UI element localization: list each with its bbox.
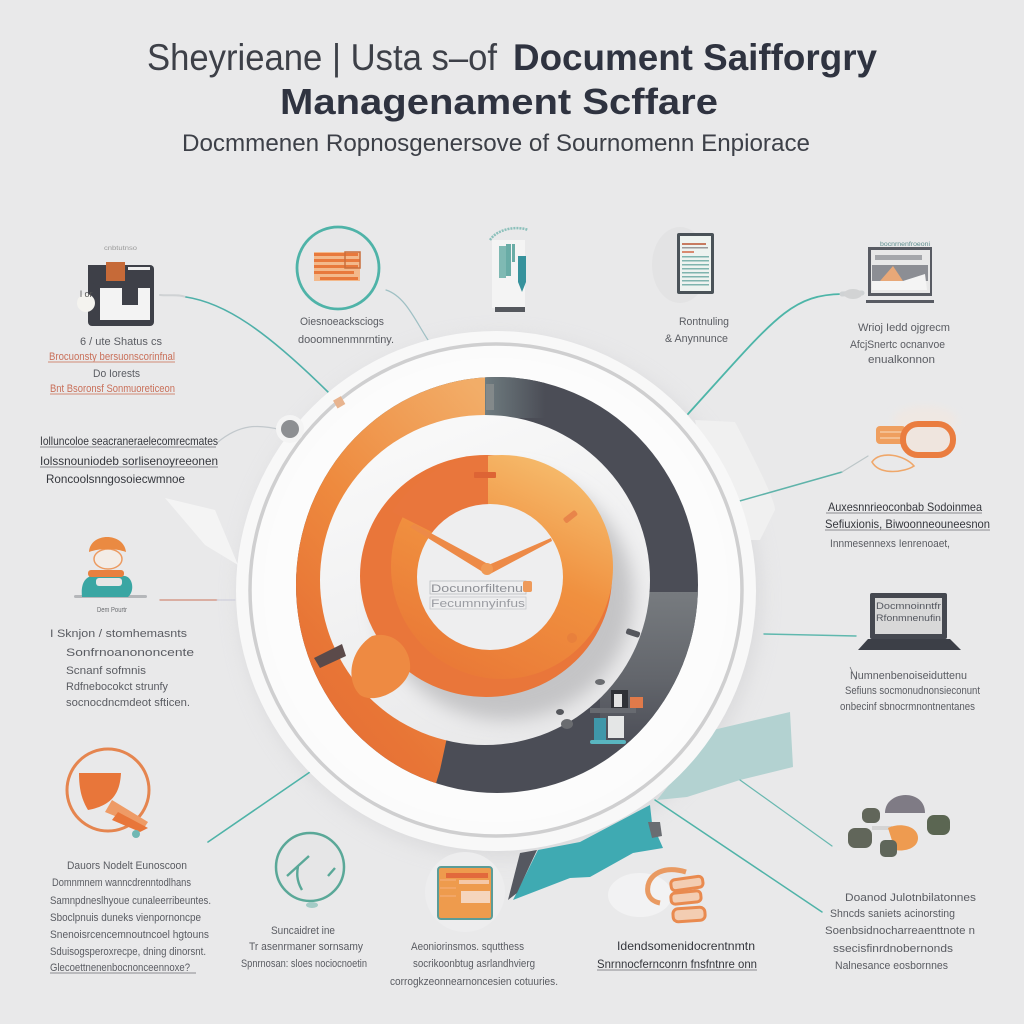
text block: bottom left: Dauors Nodelt Eunoscoon: [67, 860, 187, 872]
text block: right lower: Sefiuns socmonudnonsieconunt: [845, 685, 980, 697]
text block: bottom right: Doanod Julotnbilatonnes: [845, 892, 977, 904]
icon: printer: cnbtutnso: [104, 246, 138, 252]
title: [147, 37, 877, 122]
icon: person: [74, 537, 147, 614]
clock face: [417, 504, 563, 650]
dark band on orange arc: [314, 644, 346, 668]
text block: bottom centre: socrikoonbtug asrlandhvierg: [413, 958, 535, 970]
text block: bottom centre-right: Snrnnocfernconrn fnsfntnre onn: [597, 957, 757, 971]
icon: laptop lower: Docmnoinntfr: [876, 601, 941, 611]
icon: printer: [77, 246, 154, 326]
text block: right middle: Auxesnnrieoconbab Sodoinmea: [828, 500, 982, 514]
text block: bottom right: Shncds saniets acinorsting: [830, 908, 955, 920]
text block: right upper: [850, 322, 950, 366]
icon: teal circle: [276, 833, 344, 908]
text block: left middle: socnocdncmdeot sfticen.: [66, 697, 190, 709]
title: Document Saifforgry: [513, 37, 877, 78]
text block: teal circle: dooomnenmnrntiny.: [298, 334, 394, 346]
text block: printer: [48, 336, 175, 395]
inner deep orange ring: [360, 455, 612, 697]
grey ring: [250, 344, 742, 836]
text block: teal circle: [298, 316, 394, 346]
text block: bottom right: Nalnesance eosbornnes: [835, 960, 948, 972]
text block: bottom centre-left: Spnrnosan: sloes nociocnoetin: [241, 958, 367, 970]
icon: cluster nodes: [848, 795, 950, 857]
donut band: [296, 377, 698, 793]
text block: left upper: Roncoolsnngosoiecwmnoe: [46, 472, 185, 486]
ring marker deep: [474, 472, 496, 478]
small machine icon: [556, 679, 643, 744]
small grey node: [276, 415, 304, 443]
outer white disc: [236, 331, 756, 851]
paper shapes behind disc: [165, 420, 793, 900]
text block: left upper: Iolluncoloe seacraneraelecomrecmates: [40, 434, 218, 448]
text block: bottom left: Samnpdneslhyoue cunaleerribeuntes.: [50, 895, 211, 907]
title: Managenament Scffare: [280, 81, 718, 122]
icon: laptop lower: Rfonmnenufin: [876, 613, 941, 623]
clock label: [430, 581, 532, 610]
icon: orange stack: [608, 870, 705, 922]
text block: right middle: [825, 500, 990, 550]
clock label: Docunorfiltenu: [431, 583, 523, 595]
icon: teal circle document: [297, 227, 379, 309]
grey segment: [600, 592, 698, 748]
text block: bottom left: Glecoettnenenbocnonceennoxe?: [50, 962, 190, 974]
text block: left middle: I Sknjon / stomhemasnts: [50, 628, 188, 640]
clock hands: [410, 524, 552, 575]
text block: right upper: enualkonnon: [868, 354, 935, 366]
teardrop blob: [351, 635, 410, 698]
text block: left middle: Scnanf sofmnis: [66, 665, 147, 677]
text block: bottom centre-right: Idendsomenidocrentnmtn: [617, 939, 755, 953]
text block: bottom left: Domnmnem wanncdrenntodlhans: [52, 877, 191, 889]
icon: laptop upper: [844, 242, 934, 303]
inner light orange ring: [391, 455, 613, 679]
icon: report document: [490, 228, 528, 312]
text block: right upper: Wrioj Iedd ojgrecm: [858, 322, 950, 334]
text block: bottom centre-left: Suncaidret ine: [271, 925, 335, 937]
icon: orange circle document: [67, 749, 149, 838]
text block: printer: Do Iorests: [93, 368, 140, 380]
inner ring shadow: [377, 472, 633, 720]
donut inner hole: [320, 415, 650, 745]
text block: bottom left: Snenoisrcencemnoutncoel hgtouns: [50, 929, 209, 941]
text block: bottom left: Sduisogsperoxrecpe, dning dinorsnt.: [50, 946, 206, 958]
text block: right lower: onbecinf sbnocrmnontnentanes: [840, 701, 975, 713]
text block: bottom centre-right: [597, 939, 757, 971]
orange segment: [296, 377, 485, 784]
title: Sheyrieane | Usta s–of: [147, 37, 498, 78]
text block: tablet: [665, 316, 729, 345]
text block: bottom right: [825, 892, 977, 972]
text block: printer: 6 / ute Shatus cs: [80, 336, 162, 348]
text block: right middle: Sefiuxionis, Biwoonneouneesnon: [825, 517, 990, 531]
upper grey shade on dark segment: [485, 377, 545, 418]
text block: bottom left: [50, 860, 211, 974]
text block: bottom right: ssecisfinrdnobernonds: [833, 943, 954, 955]
subtitle: Docmmenen Ropnosgenersove of Sournomenn Enpiorace: [182, 130, 810, 157]
text block: right upper: AfcjSnertc ocnanvoe: [850, 339, 945, 351]
icon: laptop lower: [858, 593, 961, 650]
ring markers: [486, 384, 641, 643]
text block: right lower: [840, 667, 980, 713]
text block: left upper: [40, 434, 218, 486]
text block: left middle: Rdfnebocokct strunfy: [66, 681, 168, 693]
small tag on ring: [333, 396, 345, 408]
text block: bottom centre: corrogkzeonnearnoncesien cotuuries.: [390, 976, 558, 988]
dark segment: [296, 377, 698, 793]
text block: left middle: Sonfrnoanononcente: [66, 647, 194, 659]
central circular diagram: [236, 331, 756, 851]
clock label: Fecumnnyinfus: [431, 598, 526, 610]
text block: left middle: [50, 628, 194, 709]
icon: person: Dem Pourtr: [97, 607, 128, 614]
text block: right middle: Innmesennexs Ienrenoaet,: [830, 538, 950, 550]
icon: laptop upper: bocnrnenfroeoni: [880, 242, 930, 248]
text block: tablet: Rontnuling: [679, 316, 729, 328]
text block: bottom right: Soenbsidnocharreaenttnote n: [825, 925, 975, 937]
text block: printer: Bnt Bsoronsf Sonmuoreticeon: [50, 383, 175, 395]
connector lines: [160, 290, 868, 912]
icon: orange ring badge: [872, 406, 957, 472]
text block: tablet: & Anynnunce: [665, 333, 728, 345]
text block: bottom centre: Aeoniorinsmos. squtthess: [411, 941, 524, 953]
icon: orange document: [425, 852, 505, 932]
text block: bottom centre: [390, 941, 558, 988]
icon: printer: l or: [80, 289, 93, 299]
text block: printer: Brocuonsty bersuonscorinfnal: [49, 351, 175, 363]
text block: right lower: Numnenbenoiseiduttenu: [850, 670, 967, 682]
text block: left upper: Iolssnouniodeb sorlisenoyreeonen: [40, 454, 218, 468]
text block: teal circle: Oiesnoeacksciogs: [300, 316, 384, 328]
text block: bottom centre-left: [241, 925, 367, 970]
disc shadow: [238, 335, 762, 859]
text block: bottom centre-left: Tr asenrmaner sornsamy: [249, 941, 363, 953]
text block: bottom left: Sboclpnuis duneks vienpornoncpe: [50, 912, 201, 924]
icon: tablet document: [652, 227, 714, 303]
